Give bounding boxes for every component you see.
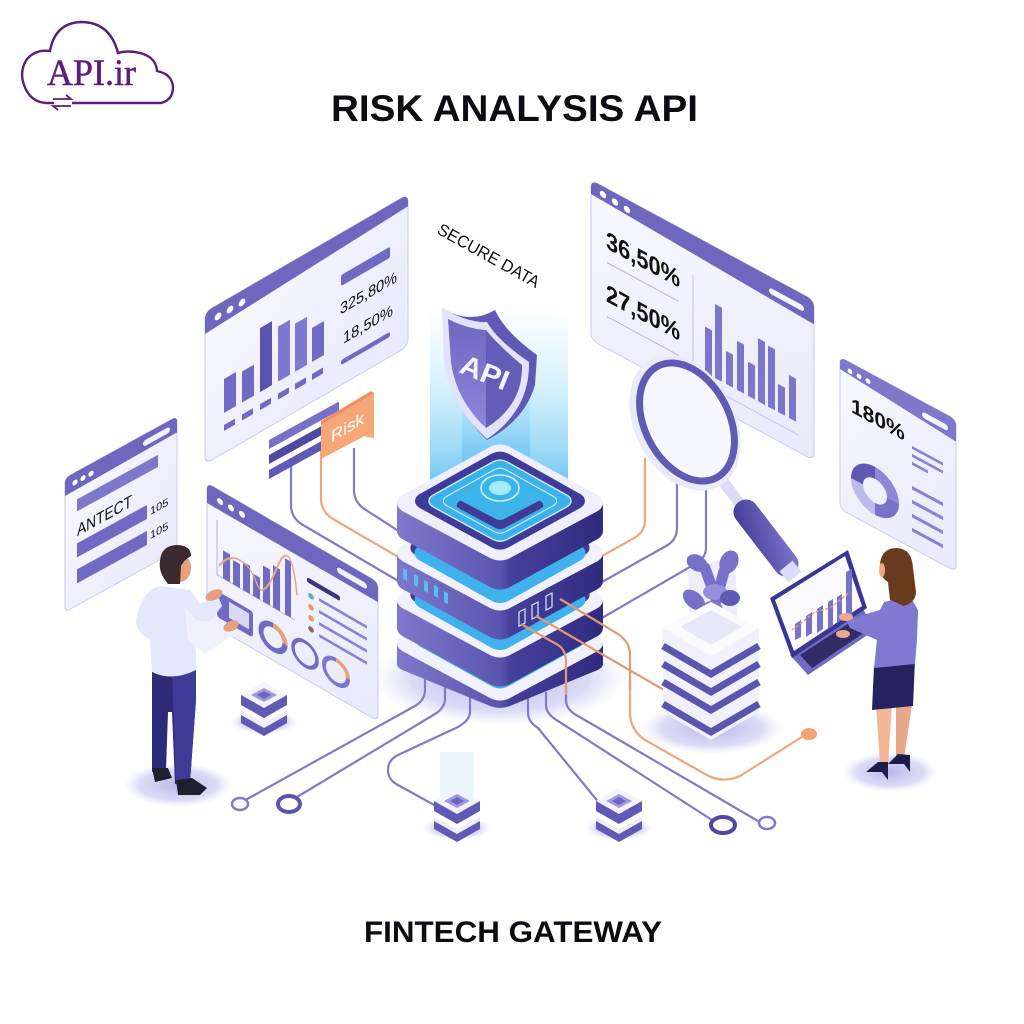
panel: right donut card: 180% [851, 393, 905, 446]
panel: top-right dashboard: 36,50% [606, 226, 680, 294]
panel: analytics dashboard [207, 483, 378, 721]
flag: Risk [321, 389, 374, 470]
panel: top-left dashboard [205, 194, 408, 464]
flag: Risk: Risk [331, 407, 365, 447]
title: RISK ANALYSIS API [331, 88, 698, 129]
jacket [846, 596, 918, 668]
skirt [872, 660, 915, 710]
slab 3 [397, 542, 603, 686]
panel: left list: 105 [150, 519, 169, 542]
slab 4 [397, 584, 603, 708]
shield: API [442, 308, 537, 440]
logo: API.ir cloud: API.ir [47, 53, 136, 94]
server stack [397, 305, 664, 708]
panel: top-left dashboard: 325,80% [340, 267, 397, 318]
hands [204, 587, 224, 603]
trousers [152, 668, 196, 784]
shield: API: API [456, 349, 514, 396]
striped data tab [269, 402, 339, 479]
caption: fintech gateway: FINTECH GATEWAY [364, 916, 662, 949]
caption: secure data: SECURE DATA [434, 220, 544, 292]
person: analyst woman with laptop [770, 548, 918, 780]
head [169, 554, 191, 582]
person: analyst man [136, 545, 240, 795]
bar chart [224, 291, 324, 431]
connector lines: orange [321, 450, 805, 780]
right data stack with plants [663, 547, 759, 740]
donut charts [261, 616, 348, 693]
panel: right donut card [840, 357, 956, 572]
shirt [136, 586, 222, 677]
laptop [770, 550, 875, 675]
magnifier [607, 336, 795, 577]
head and hair [880, 548, 916, 606]
status lights [403, 568, 448, 604]
slab 2 with status lights [397, 494, 603, 640]
line and bar chart [217, 515, 297, 621]
stack tiers [663, 602, 759, 740]
port cables [521, 599, 664, 695]
panel: top-left dashboard: 18,50% [343, 300, 393, 348]
plant crystal cluster [679, 547, 742, 642]
light beam [430, 305, 568, 505]
tablet [217, 591, 253, 638]
mini server stacks [241, 682, 642, 842]
donut [857, 463, 893, 519]
bar chart [705, 299, 796, 422]
node rings [232, 796, 775, 833]
panel: left list [65, 416, 177, 612]
panel: left list: 105 [150, 495, 169, 518]
node: orange dot [801, 728, 817, 740]
connector lines: purple [240, 448, 758, 821]
shoes [866, 762, 888, 780]
ground glows [123, 630, 938, 840]
panel: top-right dashboard: 27,50% [606, 279, 680, 347]
panel: left list: ANTECT [77, 490, 132, 540]
panel: top-right dashboard [591, 180, 814, 460]
ports [519, 593, 552, 626]
slab 1 top [397, 444, 603, 590]
logo: API.ir cloud [22, 22, 173, 110]
legs [876, 705, 892, 765]
hands [839, 613, 853, 621]
